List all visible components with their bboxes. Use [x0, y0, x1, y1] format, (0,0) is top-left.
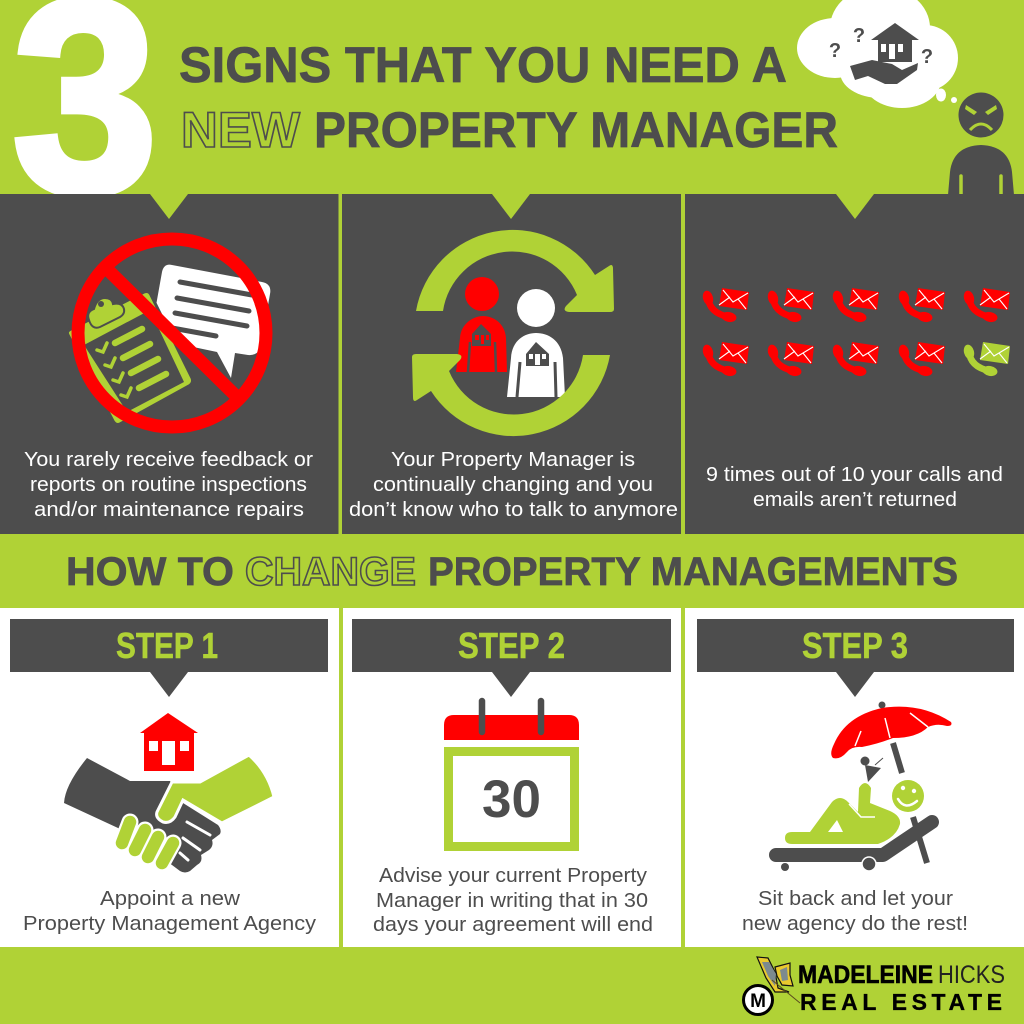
icon: calendar: 30	[482, 770, 541, 829]
step 1 banner: STEP 1	[116, 625, 218, 666]
text: step 3: new agency do the rest!	[742, 912, 968, 935]
step 2 banner	[352, 619, 671, 697]
panel: unreturned calls	[685, 194, 1024, 534]
icon: thought cloud with house in hand: ?	[921, 46, 933, 68]
icon: angry person	[948, 92, 1014, 195]
step 3 banner: STEP 3	[802, 625, 908, 666]
title: PROPERTY MANAGER	[314, 102, 838, 158]
section heading: CHANGE	[245, 550, 416, 594]
text: changing manager: don’t know who to talk to anymore	[349, 498, 678, 521]
text: step 2	[373, 864, 653, 936]
icon: person on sun lounger	[776, 702, 952, 871]
icon: M badge	[744, 986, 772, 1014]
text: changing manager: Your Property Manager is	[391, 448, 635, 471]
panel: step 2	[343, 608, 681, 947]
icon: thought cloud with house in hand	[797, 0, 958, 108]
icon: handshake	[64, 755, 274, 872]
text: step 3	[742, 887, 968, 935]
text: no feedback: reports on routine inspections	[30, 473, 307, 496]
icon: circular arrows	[412, 230, 614, 436]
icon: calendar	[444, 701, 579, 846]
logo	[744, 957, 1005, 1015]
panel: step 1	[0, 608, 339, 947]
icon: speech bubble	[152, 265, 270, 378]
step 1 banner	[10, 619, 328, 697]
panel: no feedback	[0, 194, 338, 534]
icon: white person with house	[507, 289, 565, 397]
text: unreturned calls: 9 times out of 10 your calls and	[706, 463, 1003, 486]
text: step 2: days your agreement will end	[373, 913, 653, 936]
text: no feedback	[24, 448, 313, 521]
logo: HICKS	[938, 961, 1005, 989]
step 2 banner: STEP 2	[458, 625, 565, 666]
icon: prohibition sign	[78, 239, 266, 427]
panel: step 3	[685, 608, 1024, 947]
text: changing manager: continually changing and you	[373, 473, 653, 496]
title: NEW	[181, 102, 301, 158]
title	[179, 37, 838, 158]
text: step 1: Appoint a new	[100, 887, 240, 910]
icon grid: phone and mail	[701, 288, 1010, 377]
text: step 2: Advise your current Property	[379, 864, 648, 887]
icon: M badge: M	[750, 991, 766, 1012]
text: no feedback: and/or maintenance repairs	[34, 498, 304, 521]
title: SIGNS THAT YOU NEED A	[179, 37, 787, 93]
text: unreturned calls: emails aren’t returned	[753, 488, 957, 511]
icon: thought cloud with house in hand: ?	[853, 25, 865, 47]
text: step 2: Manager in writing that in 30	[376, 889, 648, 912]
icon: clipboard checklist	[67, 291, 193, 425]
text: step 1: Property Management Agency	[23, 912, 317, 935]
step 3 banner	[697, 619, 1014, 697]
icon: thought cloud with house in hand: ?	[829, 40, 841, 62]
section heading	[66, 550, 958, 594]
text: no feedback: You rarely receive feedback or	[24, 448, 313, 471]
section heading: PROPERTY MANAGEMENTS	[428, 550, 958, 594]
icon: red person	[456, 277, 507, 372]
logo: REAL ESTATE	[800, 989, 1002, 1015]
text: changing manager	[349, 448, 678, 521]
section heading: HOW TO	[66, 550, 234, 594]
icon: red house	[140, 713, 198, 771]
panel: changing manager	[342, 194, 681, 534]
logo: MADELEINE	[798, 961, 933, 989]
text: step 1	[23, 887, 317, 935]
text: unreturned calls	[706, 463, 1003, 511]
text: step 3: Sit back and let your	[758, 887, 953, 910]
icon: butterfly	[757, 957, 800, 1003]
